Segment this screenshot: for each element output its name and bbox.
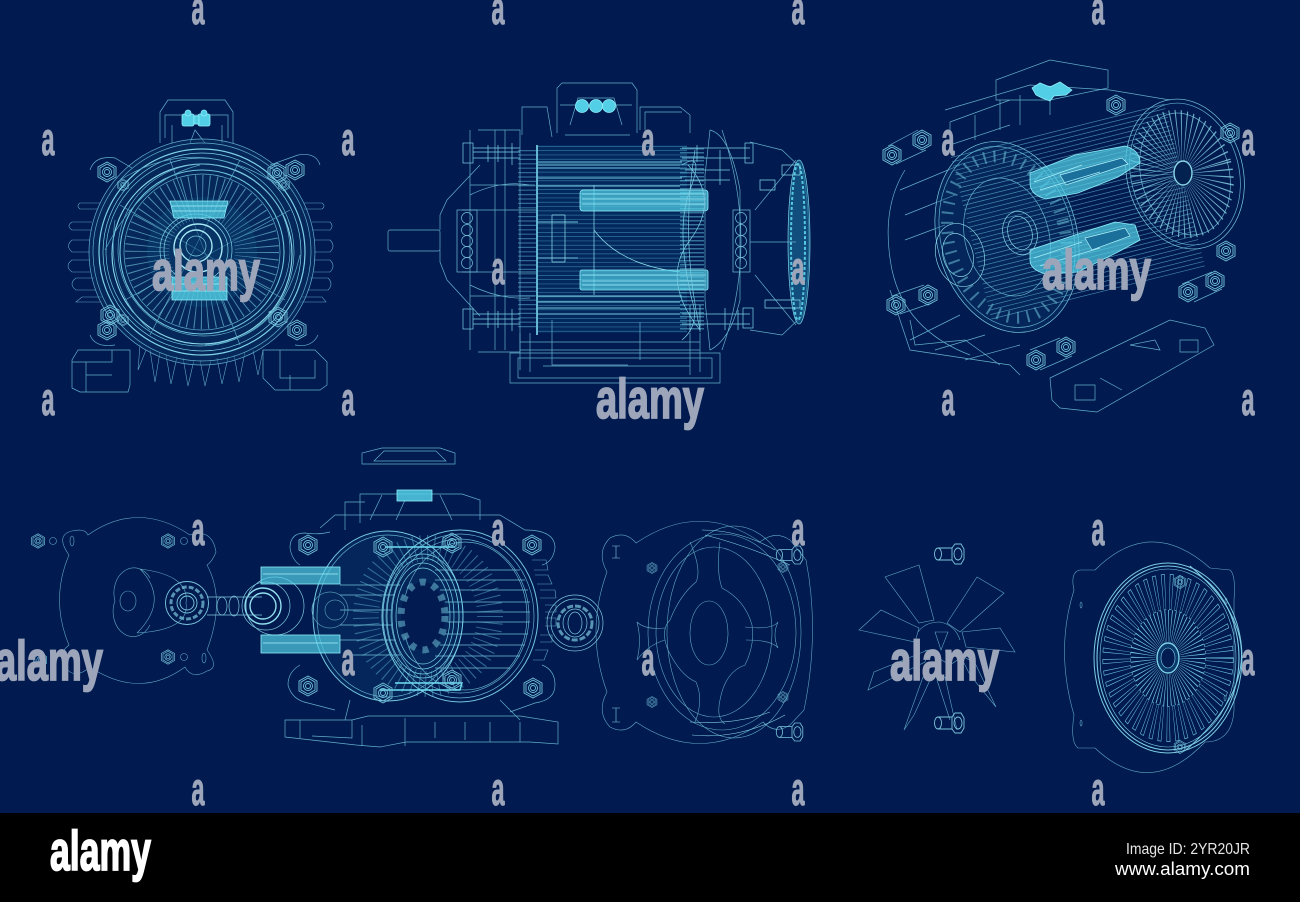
motor foot	[910, 320, 1214, 412]
motor side view	[388, 83, 810, 383]
lower stator bar	[172, 277, 227, 300]
watermark letters: a	[792, 763, 805, 815]
fan blades	[859, 565, 1015, 730]
cross frame	[637, 542, 778, 724]
rear bolts	[463, 143, 520, 331]
front housing	[705, 130, 809, 350]
watermark letters: a	[792, 503, 805, 555]
lifting lugs	[522, 107, 690, 137]
lower coil	[1030, 222, 1140, 274]
watermark logos: alamy	[152, 239, 260, 302]
fan edge	[750, 160, 810, 325]
watermark logos: alamy	[890, 629, 999, 692]
stator bolts	[299, 533, 542, 703]
watermark letters: a	[342, 373, 355, 425]
fan cover rings	[1109, 86, 1261, 262]
top cover	[362, 448, 455, 464]
bright terminals	[1032, 82, 1072, 101]
cover plate	[1064, 542, 1234, 773]
fan spokes	[1146, 132, 1218, 216]
footer logo: alamy	[50, 819, 151, 882]
front bolts	[682, 143, 753, 332]
bright bands	[538, 162, 682, 314]
upper stator bar	[170, 201, 228, 218]
radial windings	[147, 197, 257, 307]
corner bolts	[90, 154, 320, 346]
watermark letters: a	[1092, 763, 1105, 815]
right foot	[263, 350, 327, 390]
inner rotor	[552, 185, 680, 295]
front bearing	[733, 210, 750, 272]
exploded view: stator assembly	[207, 448, 603, 747]
left ring	[313, 531, 463, 701]
watermark letters: a	[42, 373, 55, 425]
plate bearing	[166, 582, 208, 624]
image id: Image ID: 2YR20JR	[1126, 841, 1250, 858]
inner ellipses	[648, 526, 801, 738]
motor front view	[68, 100, 333, 392]
watermark letters: a	[1242, 113, 1255, 165]
watermark letters: a	[942, 373, 955, 425]
central rings	[383, 554, 463, 678]
terminals	[576, 100, 616, 112]
stator cross-band	[380, 547, 462, 690]
terminals	[397, 490, 432, 501]
coil bars	[261, 567, 340, 653]
inner spokes	[1143, 626, 1193, 690]
plate outline	[60, 518, 216, 684]
back plate	[888, 85, 1170, 375]
watermark letters: a	[192, 763, 205, 815]
watermark letters: a	[642, 113, 655, 165]
radial slots	[1117, 592, 1219, 724]
fan bolts	[934, 544, 964, 733]
motor isometric view	[883, 60, 1261, 412]
plate bolts	[612, 546, 803, 741]
stator front bearing	[547, 595, 603, 651]
cover hub	[1157, 643, 1179, 673]
watermark logos	[0, 238, 1151, 692]
watermark letters: a	[42, 113, 55, 165]
bolts	[883, 95, 1239, 370]
mounting lobes	[288, 515, 555, 712]
rear endcap	[440, 130, 536, 352]
watermark logos: alamy	[1042, 238, 1151, 301]
terminal housing	[950, 60, 1108, 145]
upper stator bar	[580, 190, 708, 211]
lower stator bar	[580, 270, 708, 290]
cover bolts	[1174, 576, 1186, 754]
watermark letters: a	[1242, 373, 1255, 425]
watermark letters: a	[342, 113, 355, 165]
stator knot bands	[527, 148, 692, 332]
stator end line	[536, 145, 538, 335]
fan	[859, 544, 1015, 733]
fan cover	[1064, 542, 1242, 773]
rotor slots	[401, 582, 445, 650]
sweeping arcs	[690, 530, 790, 736]
stator slots	[366, 548, 490, 684]
left foot	[72, 350, 130, 392]
stator lines	[1058, 130, 1098, 294]
watermark letters: a	[342, 633, 355, 685]
cooling fins	[68, 203, 333, 302]
rear bearing	[457, 210, 477, 272]
footer bar	[0, 813, 1300, 902]
watermark letters: a	[1092, 503, 1105, 555]
upper coil	[1030, 146, 1140, 199]
bright terminals	[182, 110, 210, 126]
shaft	[207, 577, 348, 635]
horizontal windings	[340, 570, 530, 668]
stator fins	[532, 560, 556, 660]
rotor rings	[160, 214, 232, 286]
stator knots	[677, 150, 705, 340]
right ring	[382, 530, 538, 702]
fan hub	[1174, 161, 1192, 185]
terminal housing	[345, 494, 480, 530]
watermark logos: alamy	[596, 367, 704, 430]
bottom fins	[138, 345, 263, 386]
terminal box	[557, 83, 637, 135]
base feet	[285, 700, 558, 747]
terminal box	[160, 100, 233, 143]
watermark letters: a	[492, 242, 505, 294]
feet and base	[510, 320, 720, 383]
watermark letters: a	[492, 503, 505, 555]
outer rings	[89, 139, 315, 365]
shaft	[388, 230, 440, 251]
crescent hub	[113, 568, 186, 637]
small bolts	[760, 165, 800, 308]
exploded view: front plate	[596, 521, 813, 744]
watermark letters: a	[942, 113, 955, 165]
fan hub	[918, 622, 965, 665]
watermark letters: a	[792, 242, 805, 294]
watermark letters: a	[642, 633, 655, 685]
hub	[929, 207, 1042, 292]
stator lines	[537, 146, 687, 334]
plate bolts	[32, 534, 206, 667]
watermark letters: a	[192, 503, 205, 555]
cover rim	[1094, 563, 1242, 753]
plate outline	[596, 521, 813, 744]
front rings	[914, 125, 1100, 349]
exploded view: rear plate	[32, 518, 216, 684]
watermark letters: a	[492, 763, 505, 815]
watermark letters: a	[1242, 633, 1255, 685]
website: www.alamy.com	[1114, 859, 1250, 879]
